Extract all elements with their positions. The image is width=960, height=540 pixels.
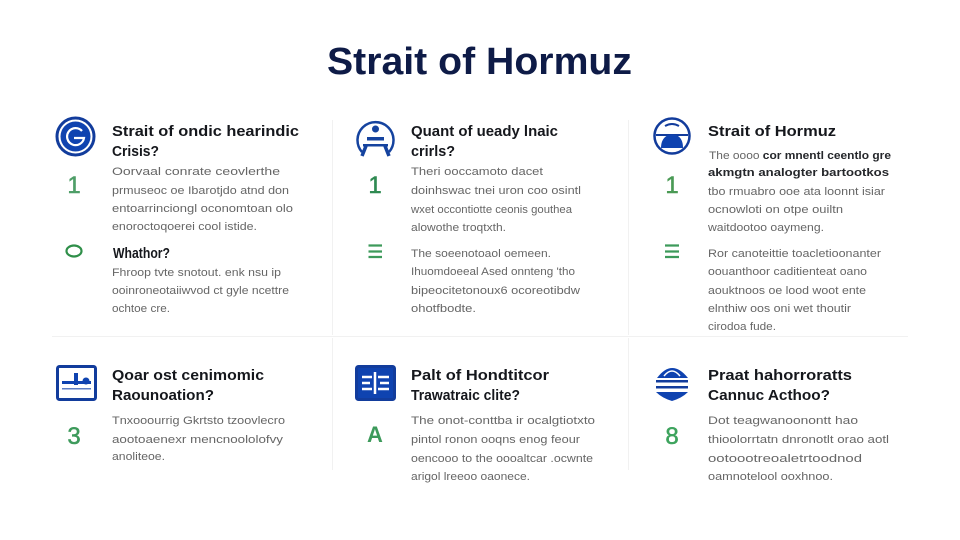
heading: Qoar ost cenimomic — [112, 368, 264, 384]
text block: cirodoa fude. — [708, 321, 776, 333]
heading — [708, 368, 852, 404]
text block: ochtoe cre. — [112, 303, 170, 315]
number 3: 3 — [67, 423, 81, 450]
heading: Cannuc Acthoo? — [708, 388, 830, 404]
text block: enoroctoqoerei cool istide. — [112, 221, 257, 233]
text block: wxet occontiotte ceonis gouthea — [410, 204, 573, 216]
icon: dome in circle — [654, 118, 690, 154]
icon: globe badge — [57, 118, 94, 155]
text block — [410, 166, 581, 234]
panel: top middle — [357, 122, 581, 315]
text block: arigol lreeoo oaonece. — [411, 471, 530, 483]
text block — [411, 248, 580, 315]
text block: Fhroop tvte snotout. enk nsu ip — [112, 267, 281, 279]
text block — [112, 415, 285, 463]
text block: oencooo to the oooaltcar .ocwnte — [411, 453, 593, 465]
heading: crirls? — [411, 144, 455, 160]
text block: elnthiw oos oni wet thoutir — [708, 303, 851, 315]
icon: outlined chart box — [58, 366, 96, 400]
text block: Ihuomdoeeal Ased onnteng 'tho — [411, 266, 575, 278]
text block: Ror canoteittie toacletioonanter — [708, 248, 881, 260]
heading: Palt of Hondtitcor — [411, 368, 549, 384]
text block: aootoaenexr mencnoololofvy — [112, 434, 284, 446]
text block — [708, 248, 881, 333]
heading: Trawatraic clite? — [411, 388, 520, 404]
panel: bottom right — [656, 368, 889, 483]
subheading: Whathor? — [113, 246, 170, 262]
title: Strait of Hormuz — [327, 41, 632, 83]
text block: thioolorrtatn dnronotlt orao aotl — [708, 434, 889, 446]
icon: striped emblem — [656, 368, 688, 401]
text block — [707, 150, 891, 234]
icon: menu lines — [665, 246, 679, 257]
text block — [112, 267, 289, 315]
text block: ooinroneotaiiwvod ct gyle ncettre — [112, 285, 289, 297]
heading: Praat hahorroratts — [708, 368, 852, 384]
icon: green ring — [66, 246, 82, 256]
text block: pintol ronon ooqns enog feour — [411, 434, 580, 446]
text block: tbo rmuabro ooe ata loonnt isiar — [708, 186, 885, 198]
text block: akmgtn analogter bartootkos — [708, 167, 889, 179]
heading: Raounoation? — [112, 388, 214, 404]
text block: prmuseoc oe Ibarotjdo atnd don — [112, 185, 289, 197]
number 1: 1 — [368, 172, 382, 199]
text block: bipeocitetonoux6 ocoreotibdw — [411, 285, 580, 297]
heading: Strait of Hormuz — [708, 124, 836, 140]
number 1: 1 — [67, 172, 81, 199]
panel: bottom left — [58, 366, 285, 463]
text block: doinhswac tnei uron coo osintl — [411, 185, 581, 197]
heading: Strait of ondic hearindic — [112, 124, 299, 140]
icon: menu lines — [368, 246, 382, 257]
text block: ocnowloti on otpe ouiltn — [708, 204, 843, 216]
text block: The onot-conttba ir ocalgtiotxto — [411, 415, 595, 427]
text block: The oooo cor mnentl ceentlo gre — [709, 150, 891, 162]
text block: Tnxooourrig Gkrtsto tzoovlecro — [112, 415, 285, 427]
text block: aouktnoos oe lood woot ente — [708, 285, 866, 297]
letter A: A — [367, 422, 383, 447]
text block: Oorvaal conrate ceovlerthe — [112, 166, 280, 178]
text block: alowothe troqtxth. — [411, 222, 506, 234]
text block: oamnotelool ooxhnoo. — [708, 471, 833, 483]
panel: top left — [57, 118, 299, 315]
text block: The soeenotoaol oemeen. — [411, 248, 551, 260]
heading — [411, 368, 549, 404]
text block — [708, 415, 889, 483]
number 1: 1 — [665, 172, 679, 199]
text block: entoarrinciongl oconomtoan olo — [112, 203, 293, 215]
icon: arch with figure — [357, 122, 394, 156]
heading — [112, 368, 264, 404]
text block: oouanthoor caditienteat oano — [708, 266, 867, 278]
heading: Crisis? — [112, 144, 159, 160]
text block: Theri ooccamoto dacet — [411, 166, 543, 178]
text block: waitdootoo oaymeng. — [707, 222, 824, 234]
text block: Dot teagwanoonontt hao — [708, 415, 858, 427]
heading — [411, 124, 558, 160]
panel: top right — [654, 118, 891, 333]
text block — [112, 166, 293, 233]
text block — [411, 415, 595, 483]
heading — [112, 124, 299, 160]
text block: anoliteoe. — [112, 451, 165, 463]
heading: Quant of ueady lnaic — [411, 124, 558, 140]
text block: ootoootreoaletrtoodnod — [708, 453, 862, 465]
panel: bottom middle — [356, 366, 595, 483]
text block: ohotfbodte. — [411, 303, 476, 315]
number 8: 8 — [665, 423, 679, 450]
icon: filled grid box — [356, 366, 394, 400]
